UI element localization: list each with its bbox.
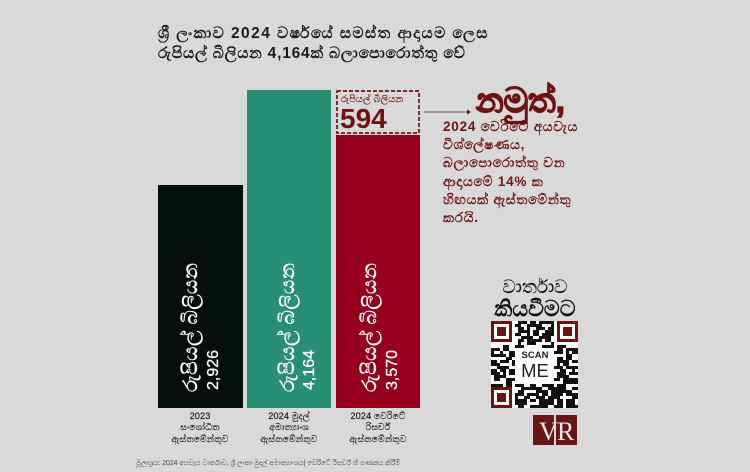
read report heading: වාර්තාව [502, 276, 567, 297]
shortfall dashed box [336, 90, 420, 134]
category label: finance ministry [260, 411, 318, 445]
label: 3,570 [358, 263, 401, 392]
label: 4,164: රුපියල් බිලියන [276, 263, 300, 392]
source note: මූලාශ්‍රය: 2024 අයවැය වාර්තාව, ශ්‍රී ලංකා මුදල් අමාත්‍යාංශය| වෙරිටේ රිසර්ච් හි ගණනය කිරීම් [136, 460, 400, 467]
label: 2,926 [179, 263, 222, 392]
callout heading: නමුත්, [476, 82, 565, 120]
category label: Verité [349, 410, 407, 445]
callout text: ආදායමේ 14% ක [443, 174, 544, 189]
label: 3,570: 3,570 [384, 350, 401, 390]
label: 3,570: රුපියල් බිලියන [358, 263, 382, 392]
shortfall value: 594 [340, 103, 387, 134]
bar: 2024 finance ministry estimate [247, 90, 331, 408]
category label: finance ministry: 2024 මුදල් [268, 411, 310, 421]
scan me label: SCAN [522, 350, 548, 361]
category label: Verité: රිසර්ච් [366, 422, 390, 432]
category label: 2023 [171, 411, 229, 445]
category label: Verité: 2024 වෙරිටේ [350, 411, 406, 421]
bar: 2023 revised estimate [158, 185, 243, 408]
category label: finance ministry: අමාත්‍යාංශ [269, 422, 309, 432]
category label: finance ministry: ඇස්තමේන්තුව [260, 434, 318, 444]
logo [533, 415, 577, 446]
bar: 2024 Verité Research estimate [336, 135, 420, 408]
label: 4,164 [276, 263, 318, 392]
callout text: 2024 වෙරිටේ අයවැය [443, 119, 578, 134]
category label: 2023: 2023 [190, 411, 210, 421]
category label: 2023: සංශෝධිත [180, 422, 220, 432]
callout text: හිඟයක් ඇස්තමේන්තු [443, 192, 571, 207]
category label: Verité: ඇස්තමේන්තුව [349, 434, 407, 444]
title: ශ්‍රී ලංකාව 2024 වර්ෂයේ සමස්ත ආදායම ලෙස [158, 25, 489, 42]
callout text: විශ්ලේෂණය, [443, 137, 525, 152]
label: 2,926: 2,926 [205, 350, 222, 390]
callout text: බලාපොරොත්තු වන [443, 155, 566, 170]
shortfall unit: රුපියල් බිලියන [341, 94, 403, 105]
callout text: කරයි. [443, 210, 479, 225]
logo: V [539, 417, 558, 446]
title [158, 24, 489, 62]
title: රුපියල් බිලියන 4,164ක් බලාපොරොත්තු වේ [158, 45, 466, 62]
read report heading [494, 276, 576, 321]
label: 4,164: 4,164 [301, 350, 318, 390]
read report heading: කියවීමට [494, 296, 576, 321]
scan me label [521, 350, 549, 381]
label: 2,926: රුපියල් බිලියන [179, 263, 203, 392]
QR code [491, 321, 578, 408]
arrow [424, 110, 471, 114]
logo: R [557, 417, 574, 446]
callout text [443, 118, 578, 225]
scan me label: ME [521, 360, 549, 381]
category label: 2023: ඇස්තමේන්තුව [171, 434, 229, 444]
